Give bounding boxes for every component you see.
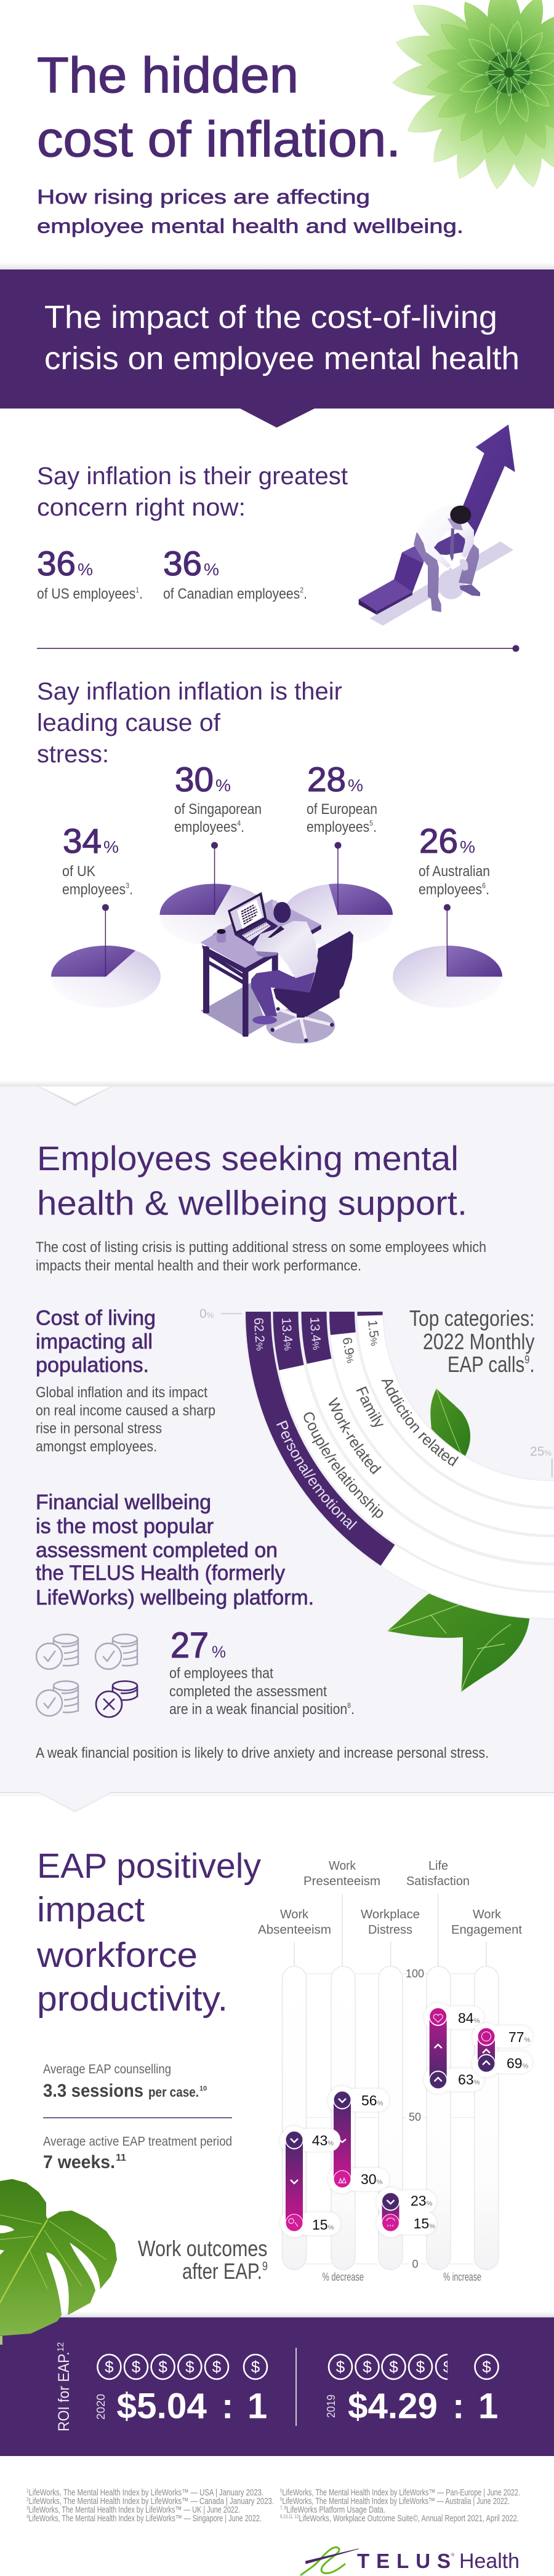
bar: work absenteeism 43 to 15: 15% (312, 2217, 334, 2233)
icon: big leaf (387, 1590, 529, 1692)
icon: coin with check 3 (36, 1681, 78, 1716)
stat: 36% Canada: of Canadian employees (163, 586, 318, 602)
bar: work absenteeism 43 to 15 (280, 2126, 340, 2237)
panel: employees seeking support section (0, 1080, 554, 1792)
footnotes right column: 9,10,11, 12 (280, 2514, 299, 2519)
icon: man slumped on rising arrow (359, 425, 515, 626)
ring: couple/relationship (282, 1318, 383, 1518)
bar: life satisfaction 84 to 63: 63% (458, 2072, 480, 2088)
notch (38, 1087, 112, 1106)
ROI value 2020 (117, 2387, 267, 2426)
man shirt (417, 506, 474, 568)
axis: 25% (530, 1445, 553, 1477)
title: cost of inflation. (37, 111, 401, 167)
footnotes left column (26, 2488, 274, 2524)
ring text paths (254, 1312, 552, 1609)
heading: leading cause of stress: leading cause of (37, 709, 221, 736)
footnotes right column: 5 (280, 2488, 283, 2494)
footnotes right column: LifeWorks Platform Usage Data. (286, 2505, 385, 2515)
tracks (283, 1966, 499, 2270)
stat: 27% weak financial position: completed the assessment (169, 1683, 327, 1700)
stat: 36% US: 1 (135, 586, 139, 594)
icon: monstera leaf (0, 2179, 117, 2345)
stat: 36% US: 36 (37, 544, 76, 583)
column labels: Work (473, 1908, 502, 1921)
axis caption: decrease: % decrease (323, 2271, 364, 2283)
text block: cost of living: populations. (36, 1354, 149, 1377)
man legs (414, 532, 480, 612)
chart caption: work outcomes: 9 (262, 2260, 268, 2273)
coins 2019: $ (363, 2358, 372, 2376)
stat: treatment period (43, 2135, 232, 2172)
stat: 30% Singapore: . (241, 819, 244, 835)
coins 2020: $ (158, 2358, 167, 2376)
text block: financial wellbeing: is the most popular (36, 1515, 214, 1538)
stat: 28% Europe: . (373, 819, 377, 835)
ROI value 2019: $4.29 (348, 2387, 438, 2426)
subtitle (37, 186, 464, 237)
leader lines (294, 1894, 487, 1966)
coins 2020: $ (212, 2358, 222, 2376)
footnotes left column: LifeWorks, The Mental Health Index by LifeWorks™ — Canada | January 2023. (28, 2497, 274, 2506)
coins 2019: $ (389, 2358, 398, 2376)
stat: 34% UK: employees (62, 881, 134, 898)
axis: 0%: 0% (199, 1307, 214, 1321)
icon: leaf small (430, 1389, 470, 1457)
torso (254, 921, 318, 978)
coins 2019: $ (336, 2358, 345, 2376)
heading: EAP productivity: EAP positively (37, 1846, 261, 1886)
footnotes left column: 4 (26, 2514, 29, 2519)
heading: EAP productivity: workforce (36, 1936, 198, 1975)
ring: work-related (310, 1318, 382, 1475)
heading: top categories: EAP calls (448, 1352, 542, 1377)
coins 2019: $ (416, 2358, 425, 2376)
stat: 28% Europe: % (348, 776, 363, 795)
coins 2020: $ (251, 2358, 260, 2376)
stat: 28% Europe: employees (307, 819, 378, 835)
ring: couple/relationship: 13.4% (282, 1318, 292, 1350)
stat: 34% UK: . (129, 881, 133, 898)
stat: 34% UK (62, 821, 133, 898)
ROI label: 12 (55, 2342, 66, 2351)
text block: cost of living (36, 1307, 215, 1455)
stat: 26% Australia: of Australian (419, 863, 490, 880)
stat: 34% UK: 34 (63, 821, 102, 860)
bar: work engagement 77 to 69: 69% (507, 2055, 529, 2071)
bar: work presenteeism 56 to 30: 56% (361, 2092, 383, 2108)
stat: 26% Australia: employees (419, 881, 490, 898)
footnotes left column: LifeWorks, The Mental Health Index by LifeWorks™ — UK | June 2022. (28, 2505, 240, 2515)
heading: employees seeking support: health & wellbeing support. (37, 1184, 467, 1222)
axis labels: 50 (409, 2111, 421, 2123)
footnotes right column: 7, 8 (280, 2505, 287, 2511)
pie chart: Singapore 30% (160, 842, 270, 946)
stat: 30% Singapore: of Singaporean (174, 801, 262, 818)
ROI value 2019 (348, 2387, 498, 2426)
text block: financial wellbeing: Financial wellbeing (36, 1491, 211, 1514)
coins 2019 (329, 2355, 499, 2379)
ring: work-related: 13.4% (310, 1318, 321, 1350)
column labels: Presenteeism (303, 1875, 380, 1888)
icon: coin with check 1 (36, 1634, 78, 1669)
banner heading: The impact of the cost-of-living (44, 300, 497, 335)
chart caption: work outcomes (138, 2236, 268, 2284)
heading: leading cause of stress: Say inflation inflation is their (37, 678, 342, 705)
stat: 36% Canada: 36 (163, 544, 202, 583)
stat: 28% Europe: of European (307, 801, 377, 818)
stat: 34% UK: 3 (126, 881, 129, 890)
stat: 26% Australia: % (460, 837, 475, 856)
intro text: impacts their mental health and their work performance. (36, 1258, 361, 1274)
bar: workplace distress 23 to 15: 15% (414, 2215, 435, 2231)
ROI value 2019: : (452, 2387, 464, 2426)
icon: stressed worker at desk (201, 892, 353, 1043)
stat: 27% weak financial position: of employees that (169, 1665, 273, 1682)
pants (251, 970, 315, 1016)
stat: 26% Australia (419, 821, 490, 898)
heading: leading cause of stress (37, 678, 342, 768)
heading: employees seeking support (37, 1139, 467, 1222)
heading: EAP productivity (36, 1846, 261, 2019)
axis: 0% (199, 1309, 242, 1318)
text block: financial wellbeing: LifeWorks) wellbeing platform. (36, 1586, 314, 1609)
text block: financial wellbeing: the TELUS Health (formerly (36, 1561, 285, 1585)
title (37, 47, 401, 167)
ring: addiction related: 1.5% (368, 1321, 379, 1346)
intro text (36, 1239, 486, 1274)
icon: coin with check 2 (95, 1634, 137, 1669)
bar: workplace distress 23 to 15 (377, 2188, 436, 2237)
coins 2019: $ (443, 2358, 452, 2376)
axis labels: 100 (406, 1968, 424, 1980)
banner heading: crisis on employee mental health (44, 341, 520, 377)
ring: family: Family (356, 1386, 384, 1427)
coins 2020 (97, 2355, 267, 2379)
ring: family: 6.9% (343, 1338, 354, 1363)
stat: 30% Singapore: employees (174, 819, 246, 835)
text block: financial wellbeing: assessment completed on (36, 1539, 278, 1562)
column labels: Workplace (361, 1908, 420, 1921)
logo: TELUS Health: ® (451, 2553, 455, 2558)
ring: addiction related: Addiction related (381, 1379, 459, 1467)
stat: counselling sessions: 10 (199, 2085, 207, 2092)
column labels: Engagement (451, 1923, 522, 1937)
ring: personal/emotional: 62.2% (254, 1318, 265, 1351)
year 2020: 2020 (95, 2394, 107, 2420)
stat: counselling sessions (43, 2062, 207, 2101)
ring: work-related: Work-related (329, 1397, 382, 1475)
stat: 30% Singapore: 4 (237, 819, 241, 827)
column labels: Satisfaction (406, 1875, 470, 1888)
column labels: Distress (368, 1923, 412, 1937)
stat: treatment period: 11 (116, 2153, 126, 2163)
footnotes left column: LifeWorks, The Mental Health Index by LifeWorks™ — Singapore | June 2022. (28, 2514, 262, 2524)
stat: 26% Australia: 26 (419, 821, 458, 860)
bar: workplace distress 23 to 15: 23% (411, 2193, 433, 2209)
heading: top categories: 9 (524, 1354, 529, 1366)
subtitle: How rising prices are affecting (37, 186, 370, 208)
stat: 36% Canada: 2 (300, 586, 303, 594)
text block: cost of living: on real income caused a sharp (36, 1403, 215, 1419)
stat: 34% UK: % (103, 837, 119, 856)
heading: employees seeking support: Employees seeking mental (37, 1139, 459, 1178)
heading: top categories: . (529, 1352, 534, 1377)
stat: 28% Europe: 28 (307, 760, 346, 799)
ROI value 2020: : (222, 2387, 233, 2426)
chair (273, 931, 353, 1018)
grid lines (306, 1973, 475, 2264)
footnotes right column: 6 (280, 2497, 283, 2502)
heading: top categories: 2022 Monthly (423, 1329, 534, 1354)
axis caption: increase: % increase (443, 2271, 481, 2283)
stat: 30% Singapore: % (215, 776, 231, 795)
intro text: The cost of listing crisis is putting additional stress on some employees which (36, 1239, 486, 1256)
ring: addiction related (368, 1321, 459, 1467)
heading: EAP productivity: impact (37, 1890, 145, 1929)
bar: life satisfaction 84 to 63 (424, 2003, 484, 2094)
ring: personal/emotional: Personal/emotional (276, 1420, 357, 1530)
stat: 36% Canada: . (303, 586, 307, 602)
ring: couple/relationship: Couple/relationship (304, 1413, 383, 1518)
coins 2020: $ (185, 2358, 195, 2376)
text block: cost of living: amongst employees. (36, 1438, 157, 1455)
note: weak financial position: A weak financial position is likely to drive anxiety and increase personal stress. (36, 1745, 489, 1761)
stat: 30% Singapore: 30 (175, 760, 214, 799)
column labels: Life (428, 1859, 448, 1873)
stat: 27% weak financial position: % (212, 1643, 226, 1661)
year 2019: 2019 (325, 2395, 337, 2418)
stat: 27% weak financial position: are in a weak financial position (169, 1701, 371, 1718)
icon: green flower (391, 0, 554, 191)
bar: work engagement 77 to 69 (472, 2023, 532, 2077)
icon: coin with cross (96, 1681, 137, 1717)
coins 2020: $ (132, 2358, 141, 2376)
text block: cost of living: Cost of living (36, 1307, 156, 1330)
column labels: Work (280, 1908, 309, 1921)
stat: 36% US: % (78, 560, 93, 579)
stat: 27% weak financial position: 27 (171, 1625, 209, 1665)
chart caption: work outcomes: Work outcomes (138, 2236, 267, 2261)
stat: treatment period: Average active EAP treatment period (43, 2135, 232, 2148)
axis labels: 0 (412, 2258, 419, 2270)
mug (214, 929, 226, 943)
heading: greatest concern: Say inflation is their greatest (37, 463, 348, 490)
ring: family (343, 1338, 384, 1427)
stat: 28% Europe (307, 760, 377, 835)
stat: 28% Europe: 5 (369, 819, 373, 827)
column labels: Absenteeism (258, 1923, 331, 1937)
footnotes left column: LifeWorks, The Mental Health Index by LifeWorks™ — USA | January 2023. (28, 2488, 263, 2498)
stat: 36% Canada: % (204, 560, 219, 579)
stat: 26% Australia: . (486, 881, 489, 898)
stat: 26% Australia: 6 (482, 881, 486, 890)
subtitle: employee mental health and wellbeing. (37, 215, 464, 237)
banner heading (44, 300, 520, 377)
logo: TELUS Health: TELUS (357, 2550, 451, 2572)
chart: 2022 monthly EAP call categories radial (199, 1309, 554, 1619)
bar: work engagement 77 to 69: 77% (508, 2029, 531, 2045)
coins 2020: $ (105, 2358, 114, 2376)
ROI label: ROI for EAP. (55, 2345, 73, 2431)
stat: 27% weak financial position (169, 1625, 355, 1718)
text block: cost of living: rise in personal stress (36, 1420, 162, 1437)
text block: cost of living: Global inflation and its impact (36, 1384, 207, 1401)
heading: greatest concern: concern right now: (37, 494, 246, 521)
laptop (228, 892, 278, 946)
heading: EAP productivity: productivity. (37, 1979, 228, 2019)
column labels: Work (329, 1859, 356, 1873)
logo: TELUS Health (300, 2547, 520, 2575)
stat: treatment period: 7 weeks. (43, 2152, 115, 2172)
footnotes left column: 2 (26, 2497, 29, 2502)
bar: work presenteeism 56 to 30 (328, 2086, 389, 2193)
heading: top categories (409, 1306, 534, 1377)
bar: work presenteeism 56 to 30: 30% (361, 2171, 383, 2187)
ROI value 2019: 1 (478, 2387, 498, 2426)
panel: impact banner (0, 262, 554, 428)
stat: 27% weak financial position: 8 (347, 1701, 351, 1710)
chart: work outcomes after EAP (258, 1859, 532, 2283)
divider (295, 2348, 297, 2426)
footnotes left column: 1 (26, 2488, 29, 2494)
pie chart: Australia 26% (393, 904, 502, 1008)
stat: counselling sessions: per case. (148, 2084, 199, 2100)
stat: 30% Singapore (174, 760, 262, 835)
coins 2019: $ (482, 2358, 491, 2376)
stat: 34% UK: of UK (62, 863, 95, 880)
text block: cost of living: impacting all (36, 1330, 153, 1354)
stat: 36% US: of US employees (37, 586, 150, 602)
panel: EAP section divider (0, 1792, 554, 1812)
stat: counselling sessions: 3.3 sessions (43, 2081, 143, 2101)
footnotes (26, 2488, 520, 2524)
panel: ROI band (0, 2311, 554, 2456)
ring: personal/emotional (254, 1318, 357, 1530)
stat: 36% Canada (163, 544, 307, 602)
stat: 36% US (37, 544, 143, 602)
divider (37, 645, 520, 652)
pie chart: Europe 28% (283, 842, 393, 946)
column labels (258, 1859, 522, 1937)
logo: TELUS Health: Health (459, 2550, 520, 2573)
stat: 36% US: . (139, 586, 143, 602)
footnotes left column: 3 (26, 2505, 29, 2511)
title: The hidden (37, 47, 299, 103)
stat: 27% weak financial position: . (351, 1701, 355, 1718)
chart caption: work outcomes: after EAP. (182, 2259, 280, 2284)
text block: financial wellbeing (36, 1491, 314, 1609)
axis labels (406, 1968, 424, 2270)
heading: leading cause of stress: stress: (37, 741, 109, 768)
heading: greatest concern (37, 463, 348, 521)
axis: 25%: 25% (530, 1445, 552, 1459)
bar: work absenteeism 43 to 15: 43% (312, 2132, 334, 2148)
bar: life satisfaction 84 to 63: 84% (458, 2010, 480, 2026)
ROI value 2020: 1 (247, 2387, 267, 2426)
stat: counselling sessions: Average EAP counselling (43, 2062, 171, 2076)
ROI value 2020: $5.04 (117, 2387, 207, 2426)
footnotes right column (280, 2488, 520, 2524)
pie chart: UK 34% (51, 904, 161, 1008)
